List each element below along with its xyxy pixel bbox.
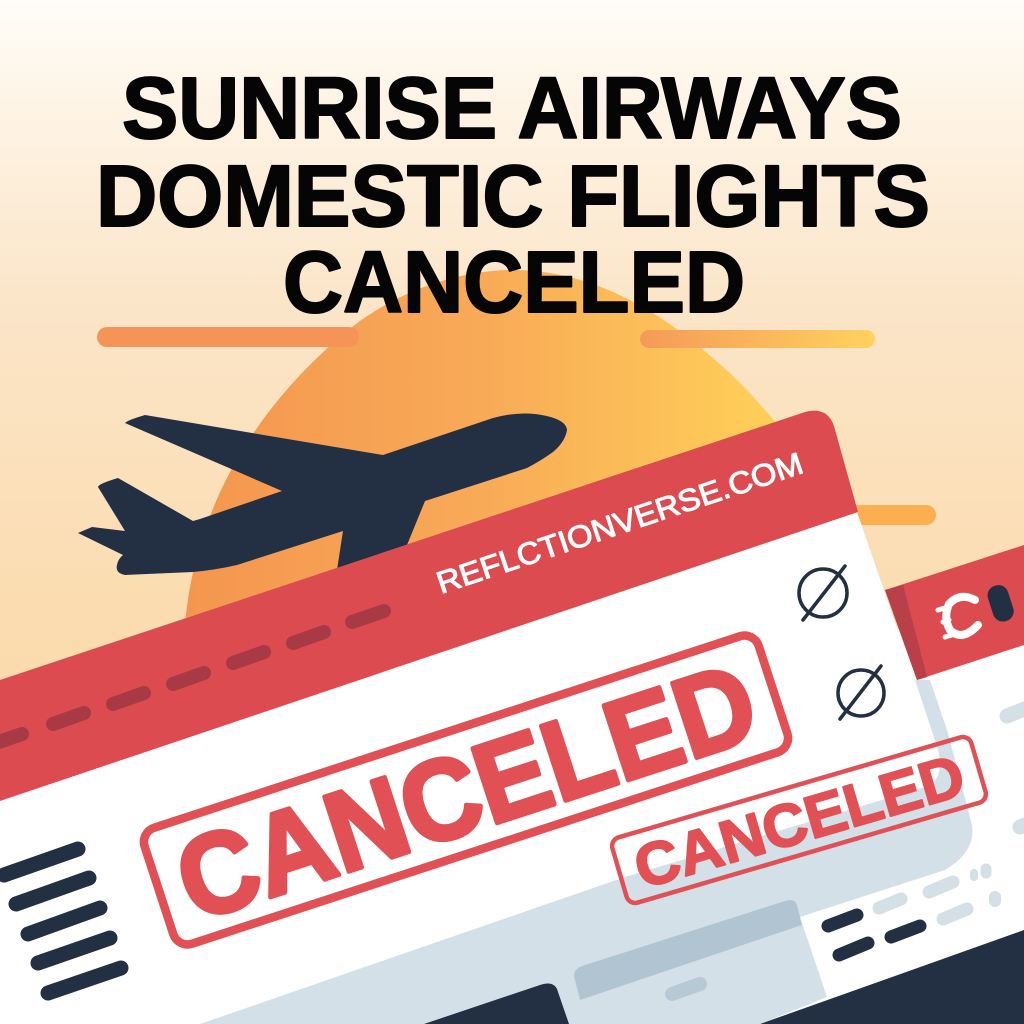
website text: REFLCTIONVERSE.COM [432, 446, 807, 601]
small canceled stamp: CANCELED [627, 742, 972, 901]
icon: header C glyph [938, 597, 978, 637]
second boarding pass, behind [200, 545, 1024, 1024]
header dark pill [985, 582, 1016, 624]
title: SUNRISE AIRWAYS [122, 60, 902, 157]
grey pill [672, 984, 700, 994]
darker grey band [574, 900, 802, 1000]
icon: null symbol one [799, 566, 847, 620]
icon: null symbol two [838, 666, 884, 719]
large canceled stamp: CANCELED [162, 639, 772, 946]
title: CANCELED [283, 234, 745, 331]
second pass dark header edge [885, 585, 927, 680]
barcode bars [4, 849, 121, 993]
perforation dashes [0, 611, 384, 745]
shadow and grey panel [200, 680, 972, 1024]
dark detail pills [828, 915, 920, 955]
dark inset block [424, 984, 569, 1024]
main boarding pass [0, 411, 940, 1024]
second pass red header [885, 545, 1024, 680]
title [96, 60, 930, 331]
lower horizon streak [840, 505, 936, 525]
icon: airplane silhouette [78, 414, 567, 575]
sun [183, 270, 795, 720]
title: DOMESTIC FLIGHTS [96, 148, 930, 245]
right horizon streak [640, 330, 875, 348]
second pass white body [700, 560, 1024, 1024]
light detail pills [879, 707, 1024, 919]
main pass red header [0, 411, 858, 801]
main pass white body [0, 512, 940, 1024]
dark footer band [760, 930, 1024, 1024]
left horizon streak [97, 327, 359, 347]
